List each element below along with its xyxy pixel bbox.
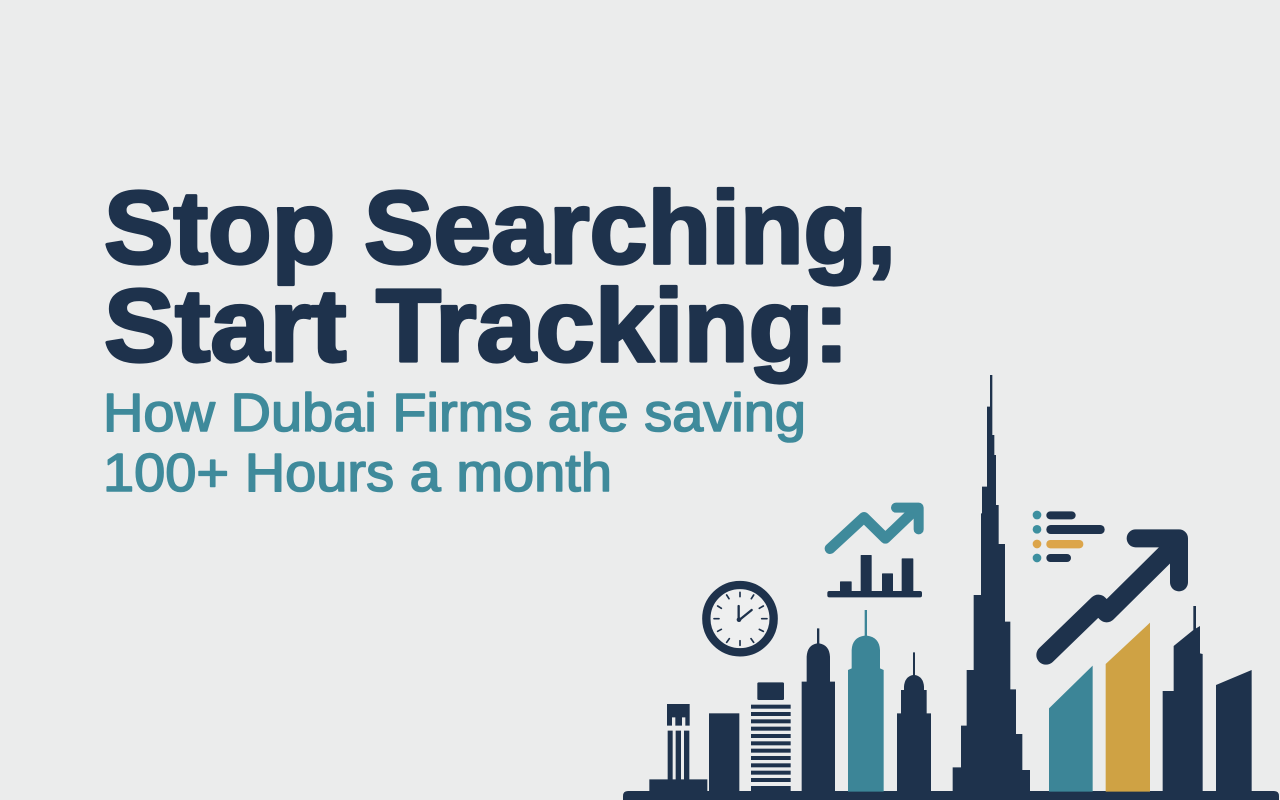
- right skyline buildings: [1049, 606, 1252, 792]
- title: Stop Searching,: [104, 170, 896, 285]
- left skyline buildings: [649, 610, 931, 792]
- subtitle: [103, 383, 806, 503]
- domed tower: [802, 628, 835, 792]
- subtitle: 100+ Hours a month: [103, 443, 612, 503]
- icon: rising line with bar chart: [827, 508, 922, 597]
- small domed tower: [897, 652, 931, 792]
- skyline ground bar: [623, 791, 1279, 800]
- navy stepped tower: [1163, 606, 1203, 792]
- plain block: [709, 713, 739, 792]
- title: [104, 170, 896, 383]
- Burj tower: [953, 375, 1030, 792]
- title: Start Tracking:: [104, 268, 849, 383]
- icon: clock: [706, 585, 774, 652]
- big rising arrow: [1046, 538, 1179, 655]
- subtitle: How Dubai Firms are saving: [103, 383, 806, 443]
- teal bar building: [1049, 666, 1093, 792]
- small bar chart: [827, 555, 922, 597]
- tower with columns: [649, 704, 707, 792]
- navy slanted block: [1216, 670, 1252, 792]
- rising teal arrow: [830, 508, 919, 549]
- gold bar building: [1106, 623, 1150, 792]
- teal domed tower: [848, 610, 884, 792]
- striped tower: [751, 682, 791, 792]
- icon: list legend: [1033, 511, 1105, 562]
